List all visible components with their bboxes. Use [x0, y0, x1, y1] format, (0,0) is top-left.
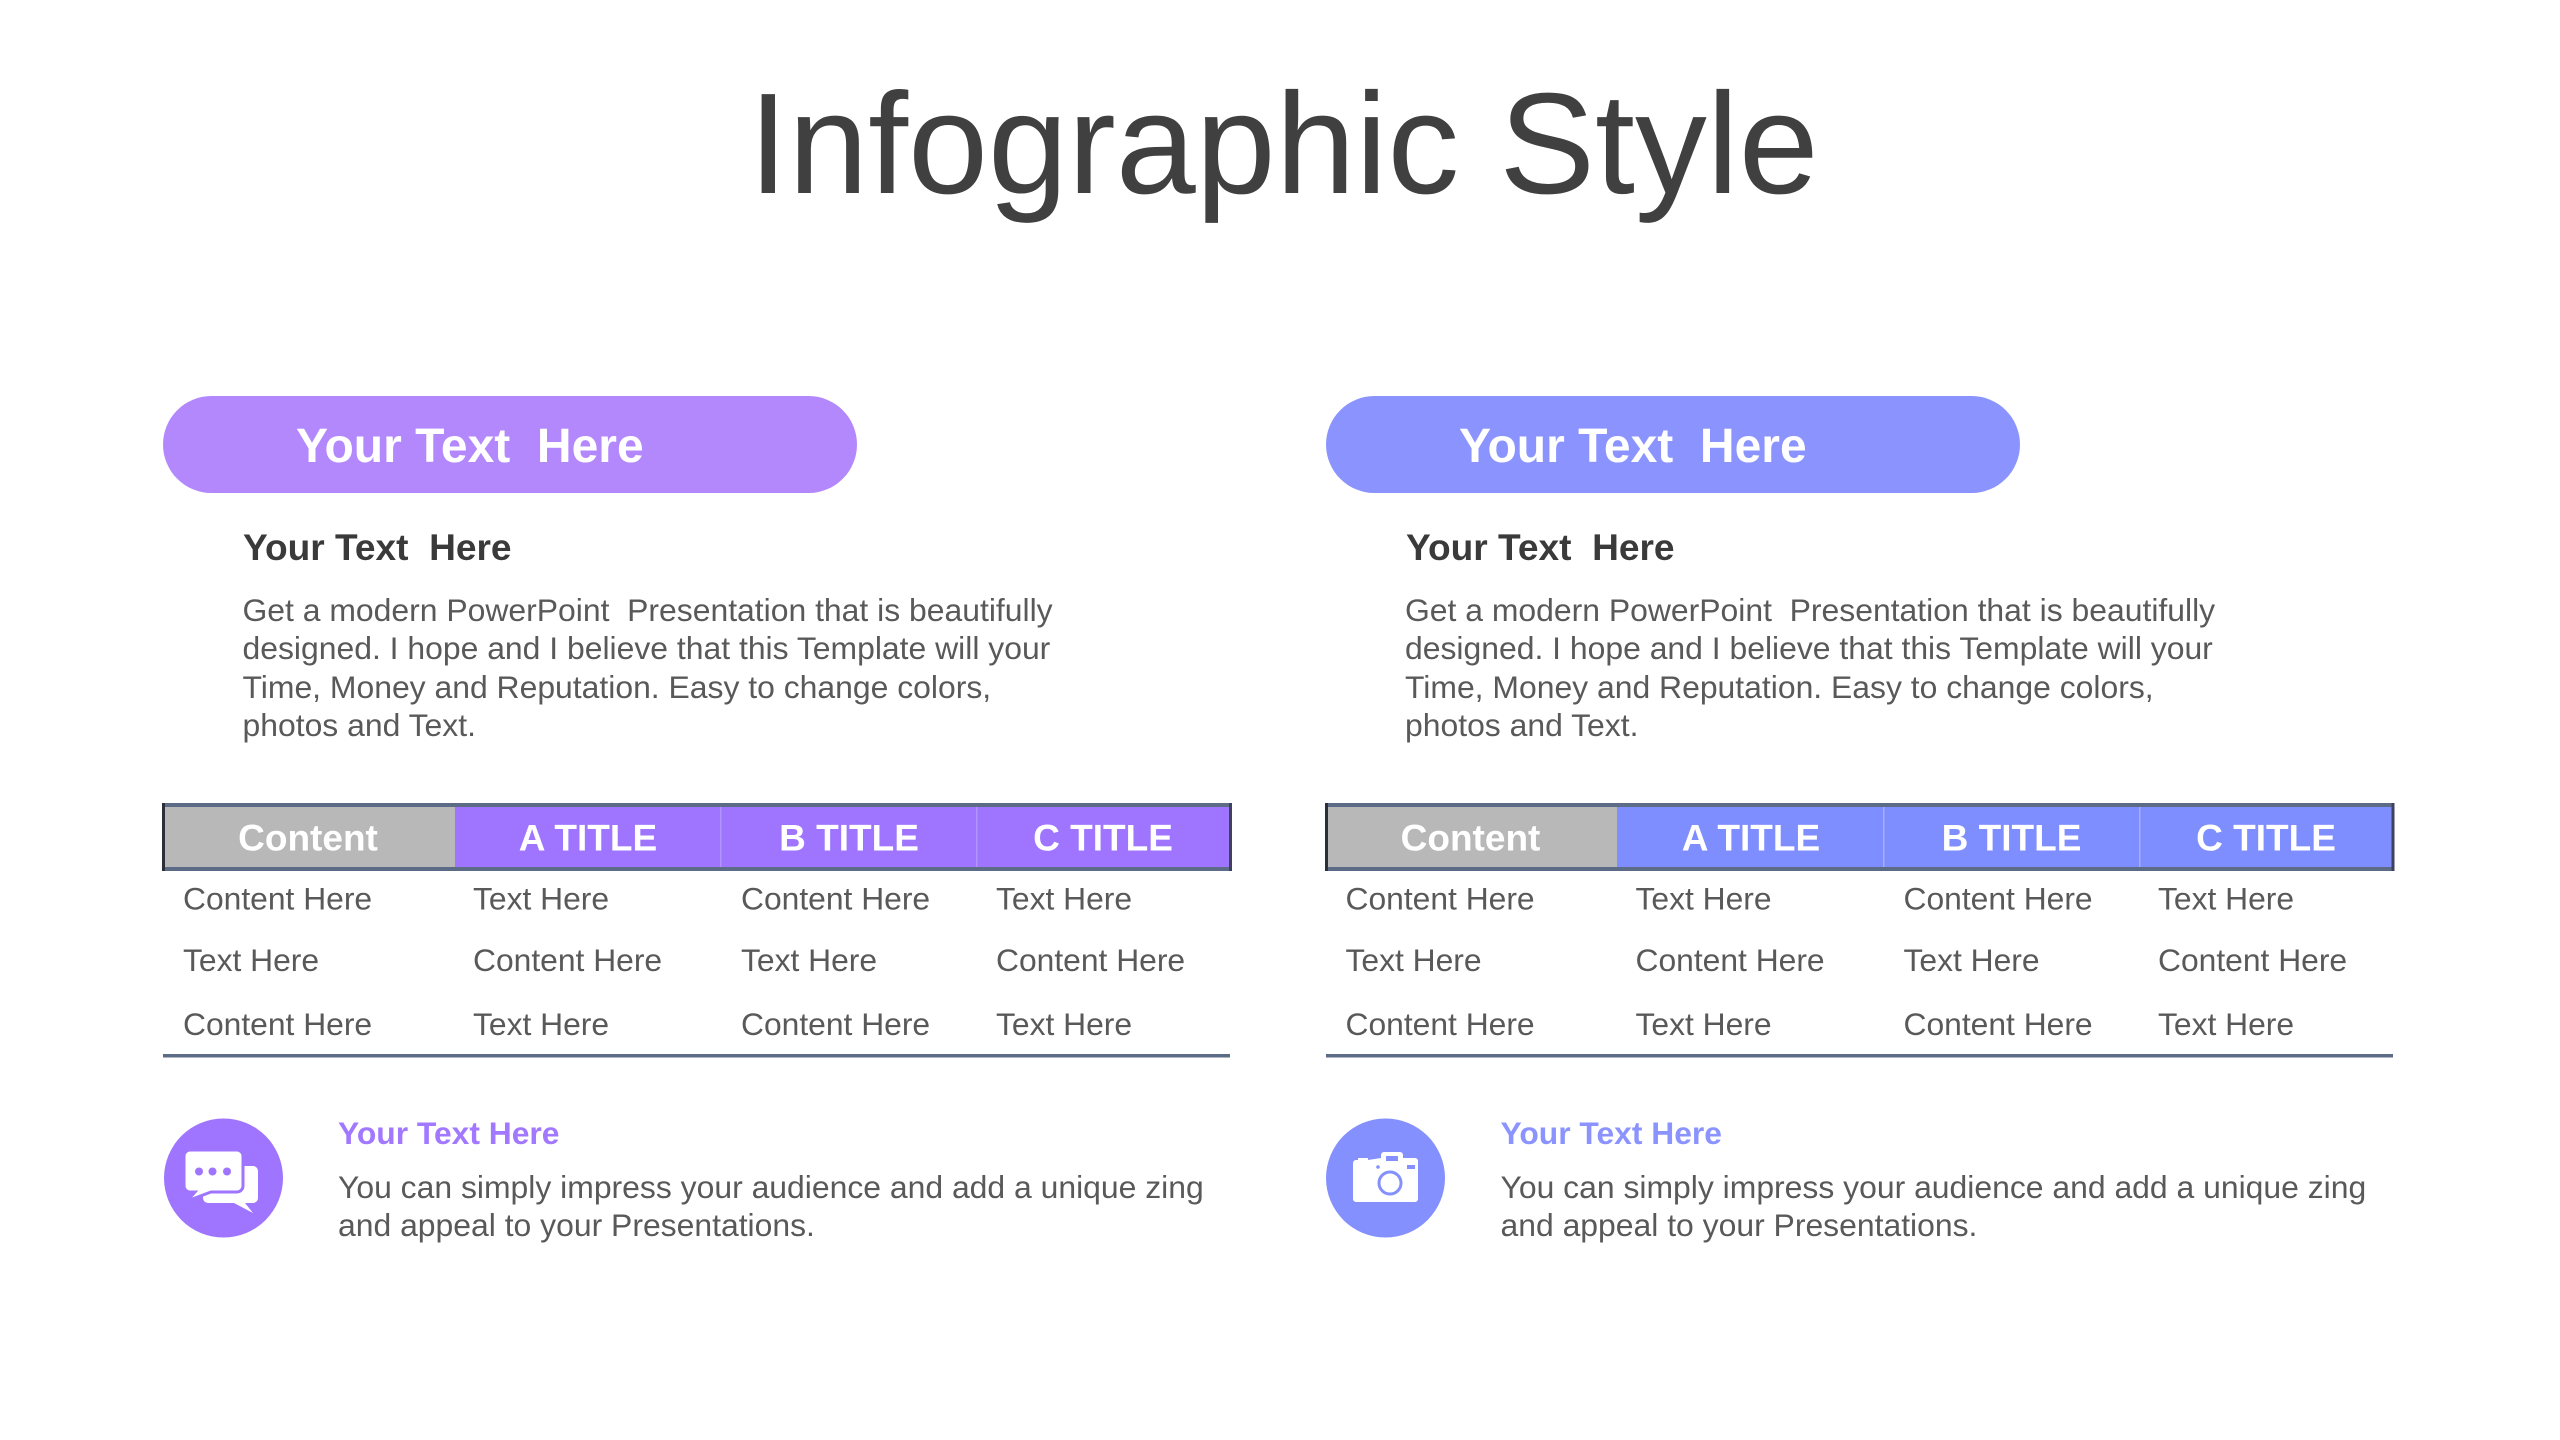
body paragraph: left: Get a modern PowerPoint Presentation that is beautifully: [242, 592, 1053, 628]
table body rows: right: Content Here: [1636, 942, 1825, 978]
panel: left purple column: [0, 0, 1248, 1243]
table body rows: left: [183, 880, 1185, 1042]
table header row: right: B TITLE: [1942, 818, 2081, 858]
body paragraph: right: Time, Money and Reputation. Easy to change colors,: [1405, 669, 2154, 705]
pill header: right: Your Text Here: [1459, 420, 1807, 473]
table body rows: right: Text Here: [1636, 1006, 1772, 1042]
table body rows: left: Content Here: [473, 942, 662, 978]
table body rows: left: Text Here: [183, 942, 319, 978]
table body rows: right: Text Here: [1346, 942, 1482, 978]
icon: camera: [1326, 1118, 1445, 1238]
pill header: left: Your Text Here: [296, 420, 644, 473]
footer text: left: and appeal to your Presentations.: [338, 1207, 815, 1243]
subheading: left: Your Text Here: [243, 526, 512, 568]
body paragraph: right: Get a modern PowerPoint Presentation that is beautifully: [1405, 592, 2215, 628]
table header row: left: Content: [238, 818, 378, 858]
table body rows: right: Text Here: [2158, 880, 2294, 916]
table body rows: right: Text Here: [2158, 1006, 2294, 1042]
table body rows: right: Content Here: [1904, 880, 2093, 916]
table body rows: left: Text Here: [473, 880, 609, 916]
table body rows: left: Content Here: [741, 1006, 930, 1042]
table body rows: right: Content Here: [2158, 942, 2347, 978]
table body rows: left: Text Here: [996, 880, 1132, 916]
body paragraph: right: photos and Text.: [1405, 707, 1638, 743]
body paragraph: left: designed. I hope and I believe that this Template will your: [242, 630, 1051, 666]
table header row: left: C TITLE: [1033, 818, 1173, 858]
table body rows: left: Text Here: [996, 1006, 1132, 1042]
table body rows: left: Text Here: [473, 1006, 609, 1042]
table body rows: right: [1346, 880, 2347, 1042]
table body rows: right: Text Here: [1636, 880, 1772, 916]
body paragraph: right: designed. I hope and I believe that this Template will your: [1405, 630, 2213, 666]
footer heading: left: Your Text Here: [338, 1115, 559, 1151]
pill header: right: [1326, 396, 2020, 493]
subheading: right: Your Text Here: [1406, 526, 1675, 568]
footer text: left: You can simply impress your audience and add a unique zing: [338, 1169, 1204, 1205]
icon: chat bubbles: [164, 1118, 283, 1238]
table body rows: right: Content Here: [1904, 1006, 2093, 1042]
table body rows: right: Content Here: [1346, 1006, 1535, 1042]
table header row: right: A TITLE: [1682, 818, 1820, 858]
footer heading: right: Your Text Here: [1500, 1115, 1722, 1151]
table body rows: right: Content Here: [1346, 880, 1535, 916]
table body rows: left: Content Here: [996, 942, 1185, 978]
title: Infographic Style: [748, 64, 1819, 224]
table header row: right: Content: [1401, 818, 1540, 858]
table header row: left: A TITLE: [519, 818, 657, 858]
body paragraph: left: photos and Text.: [242, 707, 476, 743]
footer text: right: and appeal to your Presentations.: [1500, 1207, 1977, 1243]
table header row: right: [1325, 803, 2394, 871]
body paragraph: left: Time, Money and Reputation. Easy to change colors,: [242, 669, 991, 705]
footer text: right: You can simply impress your audience and add a unique zing: [1500, 1169, 2366, 1205]
table body rows: left: Content Here: [183, 1006, 372, 1042]
table body rows: left: Content Here: [741, 880, 930, 916]
table: left: [162, 803, 1232, 1058]
table body rows: left: Content Here: [183, 880, 372, 916]
pill header: left: [163, 396, 857, 493]
table header row: left: B TITLE: [779, 818, 919, 858]
table: right: [1325, 803, 2394, 1058]
table body rows: left: Text Here: [741, 942, 877, 978]
table body rows: right: Text Here: [1904, 942, 2040, 978]
table header row: right: C TITLE: [2196, 818, 2336, 858]
table header row: left: [162, 803, 1232, 871]
